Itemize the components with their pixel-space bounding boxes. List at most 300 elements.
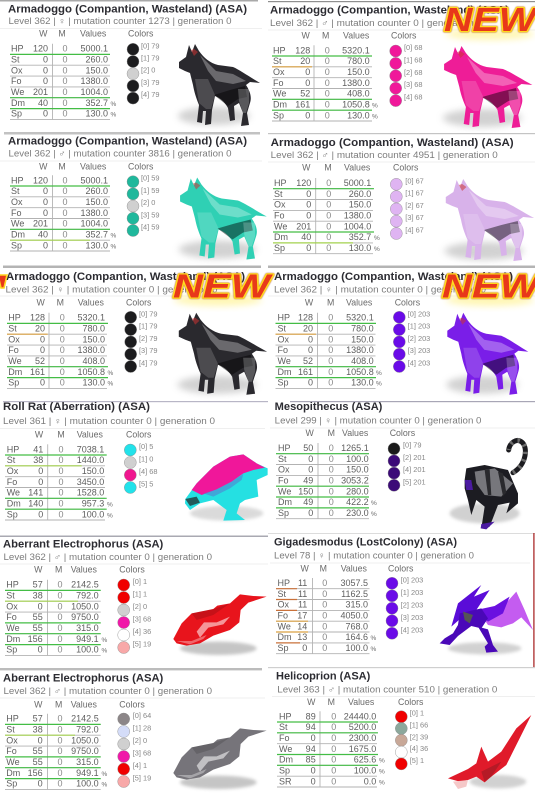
stats table: 0	[329, 508, 334, 518]
stats table: 0	[305, 67, 310, 77]
stats table: %	[110, 101, 116, 108]
creature: teal armadoggo	[179, 178, 267, 260]
stats table: We	[7, 488, 20, 498]
color swatches: [1] 0	[139, 454, 153, 464]
stats table: 0	[325, 100, 330, 110]
stats table: 0	[331, 733, 336, 743]
stats table: %	[107, 501, 113, 508]
stats table: %	[374, 246, 380, 253]
column headers: M	[55, 565, 62, 575]
stats table: 0	[308, 345, 313, 355]
stats table	[277, 711, 385, 787]
stats table: 0	[311, 776, 316, 786]
stats table: 55	[33, 623, 43, 633]
column headers: M	[57, 429, 65, 439]
stats table: Ox	[11, 65, 23, 75]
stats table: 408.0	[347, 89, 370, 99]
stats table	[7, 313, 114, 389]
column headers: Colors	[128, 161, 154, 171]
stats table: 0	[58, 488, 64, 498]
panel: Roll Rat	[3, 401, 268, 521]
stats table: 1050.0	[71, 601, 99, 611]
title: Gigadesmodus (LostColony) (ASA)	[274, 537, 457, 549]
stats table: 0	[308, 465, 313, 475]
stats table: 0	[43, 208, 48, 218]
stats table: %	[379, 758, 385, 765]
stats table: 280.0	[346, 486, 369, 496]
stats table: 11	[298, 578, 307, 588]
color swatches: [3] 203	[408, 346, 430, 355]
stats table: 1162.5	[341, 589, 368, 599]
stats table: Sp	[8, 378, 19, 388]
stats table: 230.0	[346, 508, 369, 518]
column headers	[307, 697, 424, 707]
stats table: 100.0	[82, 509, 104, 519]
stats table: 0	[57, 612, 63, 622]
panel: Armadoggo magenta, NEW	[270, 1, 535, 128]
stats table: 5320.1	[77, 313, 105, 323]
title: Aberrant Electrophorus (ASA)	[3, 673, 163, 685]
stats table: Dm	[8, 367, 22, 377]
stats table: 50	[303, 443, 313, 453]
panel: Mesopithecus	[275, 401, 525, 529]
stats table: 0	[329, 443, 334, 453]
stats table: 0	[328, 367, 333, 377]
stats table: 0	[322, 621, 327, 631]
stats table: %	[379, 779, 385, 786]
stats table: HP	[278, 443, 291, 453]
stats table: 130.0	[85, 240, 108, 250]
stats table: 768.0	[345, 621, 368, 631]
stats table: Sp	[6, 645, 17, 655]
stats table: 57	[33, 580, 43, 590]
column headers: Values	[342, 428, 369, 438]
stats table: 0	[38, 466, 43, 476]
stats table: 89	[306, 711, 316, 721]
stats table: 0	[322, 643, 327, 653]
stats table	[10, 175, 116, 251]
stats table: 150.0	[82, 334, 105, 344]
stats table: 0	[43, 109, 48, 119]
creature: gigadesmodus	[440, 585, 533, 654]
color swatches	[127, 174, 160, 236]
stats table	[276, 443, 377, 519]
stats table: 0	[38, 477, 43, 487]
stats table: 0	[43, 186, 48, 196]
stats table: 0	[38, 601, 43, 611]
stats table: 0	[38, 779, 43, 789]
column headers	[305, 298, 421, 308]
color swatches	[390, 43, 422, 107]
stats table: 55	[33, 746, 43, 756]
stats table: 52	[35, 356, 45, 366]
color swatches: [3] 203	[401, 613, 423, 622]
stats table: Dm	[6, 768, 20, 778]
stats table: 0	[311, 733, 316, 743]
stats table: Ox	[273, 67, 285, 77]
stats table: 150.0	[85, 197, 108, 207]
color swatches	[118, 711, 151, 788]
color swatches: [1] 68	[404, 55, 423, 64]
column headers: Colors	[390, 428, 416, 438]
stats table: 408.0	[82, 356, 105, 366]
stats table: 0	[40, 378, 45, 388]
stats table: 150	[298, 486, 313, 496]
panel: Armadoggo black, NEW	[6, 268, 274, 395]
stats table: 5320.1	[342, 45, 370, 55]
stats table: 315.0	[76, 623, 99, 633]
color swatches: [4] 68	[139, 467, 158, 476]
column headers	[306, 428, 416, 438]
stats table: 1265.1	[341, 443, 369, 453]
color swatches: [4] 79	[141, 90, 160, 99]
stats table: 0.0	[364, 776, 376, 786]
creature: helicoprion	[448, 715, 531, 789]
stats table: Sp	[279, 765, 290, 775]
stats table: 0	[305, 110, 310, 120]
stats table: 0	[322, 632, 327, 642]
stats table: 949.1	[76, 768, 99, 778]
color swatches: [1] 28	[133, 724, 151, 732]
column headers: W	[307, 697, 316, 707]
stats table: 949.1	[76, 634, 99, 644]
stats table: St	[11, 186, 20, 196]
color swatches: [1] 79	[141, 53, 160, 62]
stats table: 0	[58, 509, 64, 519]
stats table: 150.0	[85, 65, 108, 75]
stats table: 0	[62, 219, 68, 229]
stats table: We	[274, 221, 287, 231]
color swatches: [4] 1	[133, 761, 147, 770]
stats table: 120	[33, 44, 48, 54]
stats table: 0	[306, 243, 311, 253]
panel: Armadoggo lilac, mutation counter 4951	[271, 137, 534, 261]
stats table: 0	[38, 735, 43, 745]
title: Roll Rat (Aberration) (ASA)	[3, 401, 150, 413]
title: Armadoggo (Compantion, Wasteland) (ASA)	[270, 5, 509, 17]
stats table: 150.0	[82, 466, 104, 476]
color swatches: [2] 203	[401, 600, 423, 609]
subtitle: Level 362 | ♀ | mutation counter 1273 | generation 0	[8, 16, 232, 26]
stats table: 0	[62, 109, 68, 119]
color swatches: [2] 0	[133, 602, 147, 611]
stats table: 0	[322, 610, 327, 620]
stats table: 150.0	[346, 465, 369, 475]
stats table: 0	[57, 634, 63, 644]
color swatches: [0] 64	[133, 711, 151, 720]
color swatches: [4] 36	[410, 744, 428, 753]
stats table: %	[102, 648, 108, 655]
stats table: 0	[326, 200, 331, 210]
color swatches	[388, 441, 426, 491]
stats table: Fo	[278, 345, 288, 355]
stats table: Fo	[278, 476, 289, 486]
column headers: W	[302, 163, 311, 173]
panel: Armadoggo teal, mutation counter 3816	[8, 136, 267, 260]
title: Armadoggo (Compantion, Wasteland) (ASA)	[274, 271, 513, 283]
color swatches: [4] 201	[403, 465, 426, 474]
stats table: 0	[62, 197, 68, 207]
color swatches: [3] 79	[139, 346, 157, 355]
stats table: HP	[273, 45, 286, 55]
stats table: 0	[331, 755, 336, 765]
creature: black armadoggo	[178, 44, 260, 126]
stats table	[276, 313, 382, 389]
column headers	[302, 163, 419, 173]
stats table: Fo	[278, 610, 288, 620]
stats table: 792.0	[76, 591, 99, 601]
stats table: 0	[40, 345, 45, 355]
color swatches	[127, 41, 160, 104]
panel: Helicoprion	[276, 671, 531, 789]
stats table: Fo	[8, 345, 19, 355]
stats table: 130.0	[347, 110, 370, 120]
stats table: 0	[62, 175, 68, 185]
stats table: 9750.0	[71, 746, 99, 756]
stats table: 0	[58, 498, 64, 508]
stats table: 130.0	[85, 109, 108, 119]
stats table: 20	[303, 324, 313, 334]
color swatches: [4] 79	[139, 358, 157, 367]
stats table: 5000.1	[80, 175, 108, 185]
stats table: 0	[62, 87, 68, 97]
stats table	[276, 578, 376, 654]
stats table: 100.0	[346, 454, 369, 464]
stats table: 780.0	[351, 324, 374, 334]
stats table: 0	[308, 508, 313, 518]
stats table: 11	[298, 589, 307, 599]
creature: magenta armadoggo	[443, 46, 532, 128]
stats table: 0	[308, 334, 313, 344]
creature: red electrophorus	[173, 594, 267, 655]
column headers: M	[320, 564, 327, 574]
color swatches: [0] 1	[410, 709, 424, 718]
stats table: 1004.0	[80, 219, 108, 229]
stats table: 0	[325, 67, 330, 77]
stats table: St	[279, 722, 288, 732]
stats table: 0	[331, 776, 336, 786]
stats table: Ox	[274, 200, 286, 210]
stats table: 1380.0	[346, 345, 374, 355]
color swatches: [2] 0	[141, 66, 155, 75]
color swatches: [4] 36	[133, 627, 151, 636]
stats table: 201	[296, 221, 311, 231]
stats table: %	[374, 235, 380, 242]
stats table: 100.0	[76, 645, 99, 655]
stats table: 0	[325, 78, 330, 88]
stats table: 52	[303, 356, 313, 366]
stats table: 1380.0	[80, 76, 108, 86]
stats table: 17	[297, 610, 307, 620]
stats table: 1440.0	[77, 455, 104, 465]
column headers: M	[58, 161, 66, 171]
stats table: 0	[328, 334, 333, 344]
stats table: 156	[28, 768, 43, 778]
stats table: 0	[43, 240, 48, 250]
color swatches: [1] 203	[408, 322, 430, 331]
stats table: 0	[57, 725, 63, 735]
stats table: %	[372, 102, 378, 110]
stats table: 0	[329, 497, 334, 507]
stats table: 0	[57, 757, 63, 767]
stats table: St	[278, 324, 287, 334]
stats table: St	[274, 189, 283, 199]
stats table: %	[376, 370, 382, 377]
stats table: St	[273, 56, 282, 66]
stats table: 150.0	[349, 200, 371, 210]
color swatches: [0] 79	[403, 441, 422, 450]
stats table: Ox	[278, 334, 290, 344]
column headers: W	[35, 429, 44, 439]
color swatches	[390, 176, 424, 240]
stats table: 0	[57, 714, 63, 724]
stats table: HP	[6, 580, 19, 590]
panel: Armadoggo black, mutation counter 1273	[8, 4, 260, 126]
color swatches: [0] 59	[141, 174, 160, 183]
stats table: 315.0	[345, 600, 368, 610]
stats table: 140	[28, 498, 43, 508]
stats table: 130.0	[351, 378, 374, 388]
stats table: 0	[308, 454, 313, 464]
stats table: We	[11, 219, 24, 229]
stats table: 2142.5	[71, 714, 99, 724]
stats table: 0	[38, 645, 43, 655]
column headers: W	[39, 161, 48, 171]
stats table: We	[8, 356, 22, 366]
stats table: 0	[57, 735, 63, 745]
stats table: 0	[57, 645, 63, 655]
column headers: W	[37, 298, 46, 308]
subtitle: Level 362 | ♀ | mutation counter 0 | generation 0	[6, 284, 218, 294]
stats table: We	[279, 744, 292, 754]
stats table: %	[110, 112, 116, 119]
stats table: %	[371, 500, 377, 507]
panel: Aberrant Electrophorus grey	[3, 673, 267, 790]
stats table: St	[6, 591, 15, 601]
stats table: We	[11, 87, 24, 97]
column headers: Colors	[119, 565, 145, 575]
column headers	[34, 699, 145, 709]
color swatches: [2] 79	[139, 334, 157, 343]
title: Armadoggo (Compantion, Wasteland) (ASA)	[8, 136, 247, 148]
stats table: 0	[329, 486, 334, 496]
stats table: 120	[296, 178, 311, 188]
stats table: 0	[62, 76, 68, 86]
stats table: 20	[300, 56, 310, 66]
stats table: 38	[33, 455, 43, 465]
stats table: Dm	[279, 755, 293, 765]
stats table: Ox	[6, 735, 18, 745]
stats table: 0	[58, 455, 64, 465]
stats table: 3053.2	[341, 476, 369, 486]
color swatches: [0] 79	[141, 41, 160, 50]
stats table: We	[6, 757, 20, 767]
stats table: Sp	[6, 779, 17, 789]
stats table: 0	[331, 765, 336, 775]
stats table: 55	[33, 757, 43, 767]
stats table: %	[107, 512, 113, 519]
column headers: Values	[80, 161, 107, 171]
stats table: %	[110, 233, 116, 240]
stats table: 161	[30, 367, 45, 377]
color swatches: [2] 0	[141, 198, 155, 207]
stats table: 100.0	[354, 765, 376, 775]
stats table: 1675.0	[349, 744, 376, 754]
stats table: St	[278, 454, 287, 464]
stats table: Sp	[7, 509, 18, 519]
stats table: HP	[7, 444, 19, 454]
creature: roll rat	[185, 454, 268, 521]
stats table: 0	[57, 580, 63, 590]
color swatches: [0] 79	[139, 309, 157, 318]
stats table: Dm	[6, 634, 20, 644]
stats table: Ox	[6, 601, 18, 611]
stats table: Sp	[11, 240, 22, 250]
stats table: 0	[58, 477, 64, 487]
stats table: 0	[60, 367, 65, 377]
stats table: Dm	[11, 230, 25, 240]
column headers: Values	[344, 163, 371, 173]
stats table: 352.7	[349, 232, 371, 242]
subtitle: Level 361 | ♀ | mutation counter 0 | generation 0	[3, 416, 215, 426]
creature: purple armadoggo	[446, 313, 528, 395]
column headers: Values	[343, 30, 370, 40]
stats table: 0	[328, 378, 333, 388]
color swatches: [0] 1	[133, 577, 147, 586]
creature: lilac armadoggo	[445, 179, 534, 261]
stats table: 130.0	[349, 243, 371, 253]
stats table: Dm	[278, 497, 292, 507]
stats table: 100.0	[76, 779, 99, 789]
stats table: 0	[328, 313, 333, 323]
stats table: 0	[325, 110, 330, 120]
column headers: Colors	[388, 564, 414, 574]
creature: black armadoggo	[178, 313, 267, 395]
stats table: 0	[43, 76, 48, 86]
subtitle: Level 362 | ♂ | mutation counter 0 | generation 0	[4, 686, 212, 696]
stats table: 0	[326, 232, 331, 242]
column headers: Colors	[119, 699, 145, 709]
stats table: 780.0	[347, 56, 370, 66]
color swatches: [1] 79	[139, 322, 157, 331]
stats table: 201	[33, 219, 48, 229]
subtitle: Level 363 | ♂ | mutation counter 510 | generation 0	[277, 684, 497, 694]
stats table: Sp	[278, 378, 289, 388]
color swatches: [2] 68	[404, 68, 423, 77]
stats table	[273, 178, 380, 254]
stats table: St	[278, 589, 287, 599]
color swatches	[125, 309, 158, 372]
column headers: W	[34, 699, 43, 709]
stats table: 0	[311, 765, 316, 775]
stats table: Fo	[11, 76, 22, 86]
stats table: Ox	[7, 466, 19, 476]
color swatches: [3] 68	[133, 614, 151, 624]
panel: Gigadesmodus	[274, 537, 533, 654]
stats table	[5, 580, 108, 656]
column headers: Colors	[395, 298, 421, 308]
stats table: HP	[279, 711, 292, 721]
stats table	[272, 45, 378, 121]
stats table: Dm	[7, 498, 21, 508]
stats table: We	[278, 356, 291, 366]
stats table: 0	[306, 210, 311, 220]
stats table: HP	[6, 714, 19, 724]
stats table: %	[371, 511, 377, 518]
badge: NEW: NEW	[444, 1, 535, 38]
stats table: 0	[331, 722, 336, 732]
stats table: %	[379, 768, 385, 775]
